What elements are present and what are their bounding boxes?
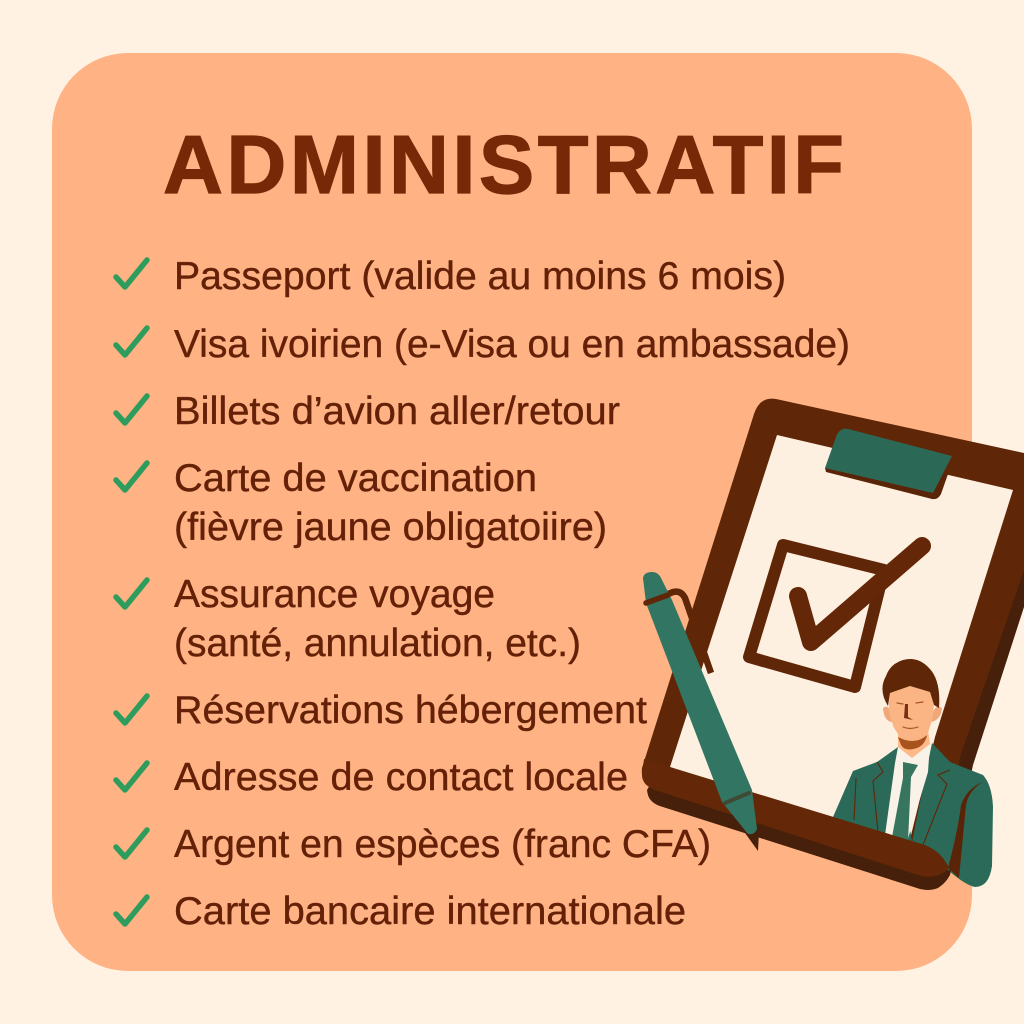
checkbox <box>749 545 884 687</box>
item: visa: Visa ivoirien (e-Visa ou en ambassade) <box>174 323 850 366</box>
item: assurance <box>116 573 581 665</box>
illustration: pen <box>643 572 759 851</box>
clip top <box>825 429 952 493</box>
title: ADMINISTRATIF <box>163 118 844 211</box>
illustration: clipboard <box>642 399 1024 890</box>
clip underside <box>825 468 948 499</box>
jacket <box>833 743 993 887</box>
neck <box>898 730 930 758</box>
checklist <box>116 255 850 933</box>
item: assurance: Assurance voyage <box>174 573 495 616</box>
face <box>889 686 934 742</box>
pen tip <box>745 831 759 851</box>
item: assurance: (santé, annulation, etc.) <box>174 622 581 665</box>
paper <box>670 435 1013 860</box>
item: hebergement: Réservations hébergement <box>174 689 647 732</box>
item: passeport: Passeport (valide au moins 6 mois) <box>174 255 786 298</box>
big check mark <box>798 546 922 642</box>
neck shadow <box>898 735 927 749</box>
bottom bar shadow <box>648 790 951 890</box>
item: billets: Billets d’avion aller/retour <box>174 390 620 433</box>
tie <box>892 762 918 841</box>
item: vaccination: (fièvre jaune obligatoiire) <box>174 506 607 549</box>
item: vaccination <box>116 457 607 549</box>
lapels <box>854 762 950 845</box>
bottom bar front <box>642 759 949 876</box>
pen band bottom <box>725 793 749 803</box>
clipboard bottom bar <box>642 759 951 890</box>
item: carte bancaire: Carte bancaire internationale <box>174 890 686 933</box>
clipboard shadow <box>647 560 1024 890</box>
clip <box>825 429 952 499</box>
illustration: man in suit <box>833 659 993 887</box>
item: argent: Argent en espèces (franc CFA) <box>174 823 711 866</box>
hair <box>882 659 939 708</box>
mouth and eyebrows <box>897 702 923 728</box>
shirt <box>885 743 930 842</box>
clipboard board <box>642 399 1024 877</box>
sleeve shade <box>948 782 983 878</box>
nose <box>904 704 913 720</box>
pen clip <box>647 592 711 673</box>
ears <box>883 707 942 722</box>
pen body <box>643 572 757 834</box>
pen band top <box>646 595 668 603</box>
item: adresse: Adresse de contact locale <box>174 756 628 799</box>
item: vaccination: Carte de vaccination <box>174 457 537 500</box>
